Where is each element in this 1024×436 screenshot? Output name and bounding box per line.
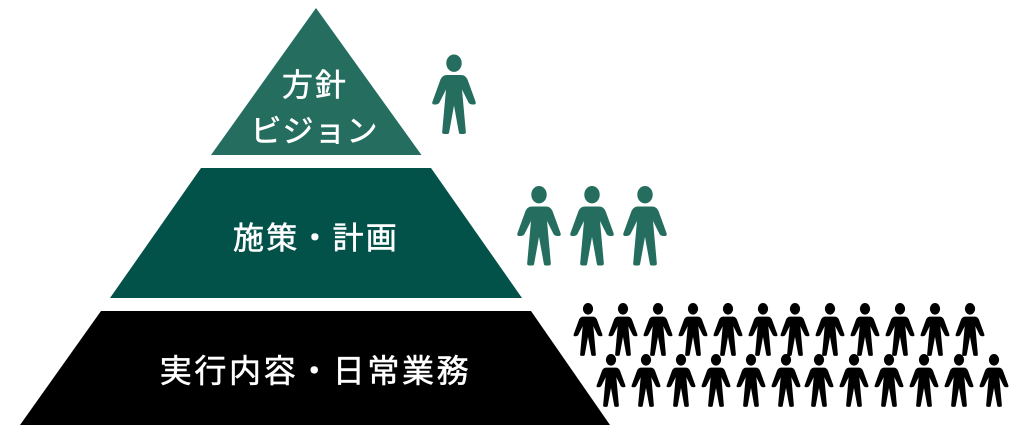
pyramid tier: 方針 ビジョン — [211, 8, 422, 155]
icons: crowd of people — [574, 303, 1008, 407]
pyramid tier: 実行内容・日常業務 — [20, 311, 610, 425]
label: 施策・計画: 施策・計画 — [233, 221, 399, 256]
top triangle — [211, 8, 422, 155]
label: 実行内容・日常業務: 実行内容・日常業務 — [160, 353, 471, 389]
icons: three people — [517, 186, 667, 266]
pyramid tier: 施策・計画 — [110, 168, 522, 298]
icon: one person — [432, 54, 476, 134]
middle trapezoid — [110, 168, 522, 298]
label: 方針: 方針 — [282, 68, 348, 103]
label: ビジョン: ビジョン — [250, 114, 378, 149]
bottom trapezoid — [20, 311, 610, 425]
